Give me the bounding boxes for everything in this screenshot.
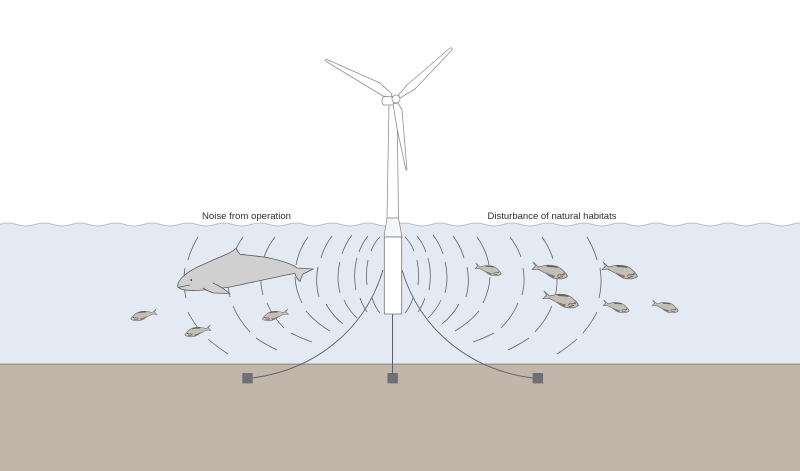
hub	[392, 95, 400, 103]
anchor: left	[242, 373, 253, 383]
transition piece	[384, 218, 402, 237]
mooring line: left	[252, 270, 383, 378]
noise waves: left	[184, 235, 380, 354]
blade: upper right	[398, 48, 452, 98]
nacelle	[382, 96, 394, 105]
anchor: right	[533, 373, 543, 383]
fish: left 3	[262, 309, 288, 321]
water	[0, 223, 800, 365]
mooring line: centre	[392, 314, 393, 374]
fish: left 2	[185, 325, 211, 337]
tower	[387, 104, 398, 218]
anchor: centre	[388, 373, 398, 383]
fish: right 6	[652, 300, 678, 313]
mouth	[178, 285, 190, 288]
fish: right 5	[603, 300, 629, 313]
label: disturbance: Disturbance of natural habitats	[488, 210, 617, 221]
fish: right 3	[543, 291, 578, 308]
fish: left 1	[131, 309, 157, 321]
noise waves: right	[405, 235, 601, 354]
blade: lower	[393, 103, 407, 170]
label: noise: Noise from operation	[202, 210, 291, 221]
eye	[190, 279, 192, 281]
dolphin	[178, 248, 313, 294]
wind turbine	[325, 48, 452, 314]
fish: right 1	[475, 263, 501, 276]
blade: upper left	[325, 60, 392, 97]
mooring line: right	[402, 270, 533, 378]
flipper	[203, 283, 230, 294]
fish: right 2	[532, 262, 568, 279]
seabed surface line	[0, 364, 800, 365]
seabed	[0, 364, 800, 471]
monopile	[384, 237, 402, 314]
fish: right 4	[602, 262, 638, 279]
